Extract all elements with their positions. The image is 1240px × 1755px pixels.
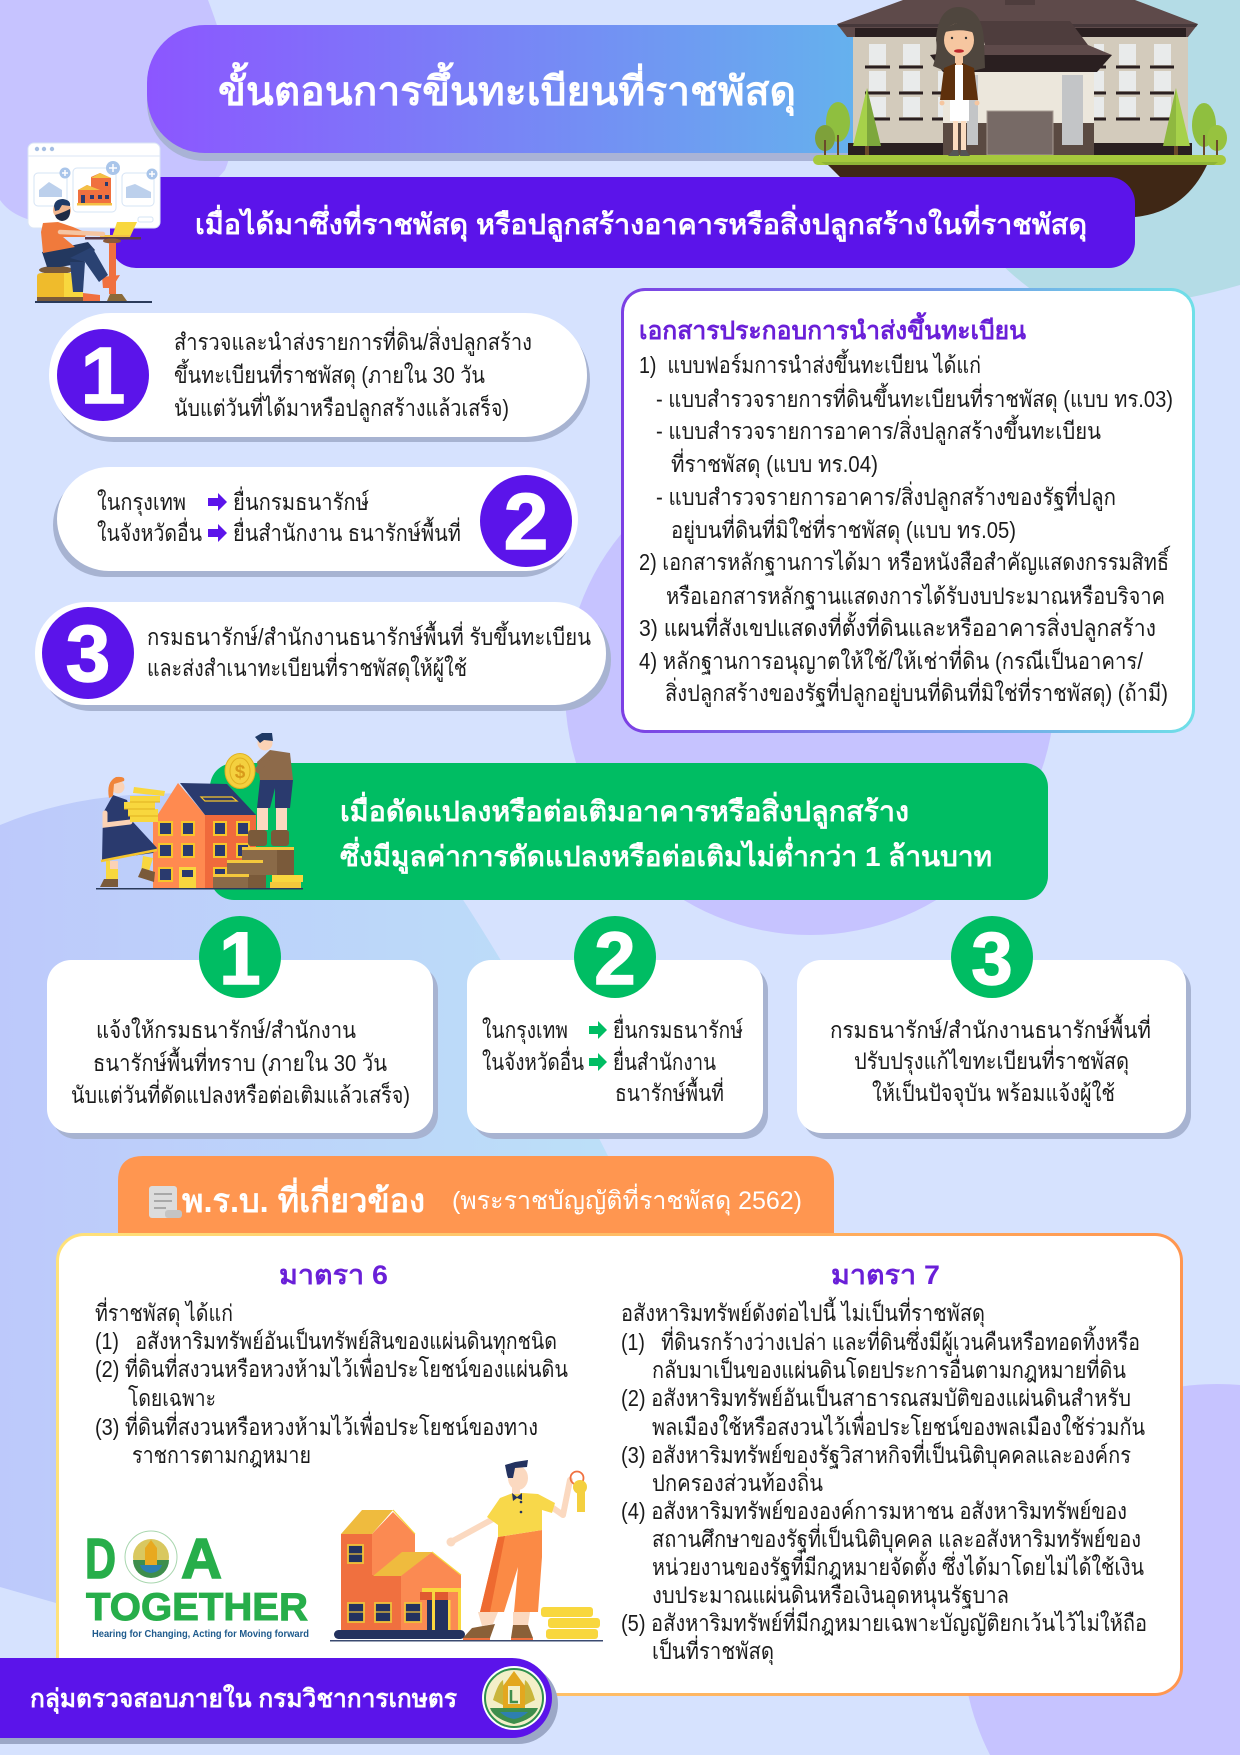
section 7 text: (3) อสังหาริมทรัพย์ของรัฐวิสาหกิจที่เป็นนิติบุคคลและองค์กร (621, 1439, 1131, 1469)
card 2: ในจังหวัดอื่น (482, 1046, 584, 1075)
documents list: 2) เอกสารหลักฐานการได้มา หรือหนังสือสำคัญแสดงกรรมสิทธิ์ (639, 545, 1171, 576)
card 2 (467, 916, 768, 1139)
step 2 number: 2 (504, 477, 548, 566)
card 1: ธนารักษ์พื้นที่ทราบ (ภายใน 30 วัน (93, 1047, 387, 1076)
section 7 text: ปกครองส่วนท้องถิ่น (652, 1467, 823, 1496)
card 3: ให้เป็นปัจจุบัน พร้อมแจ้งผู้ใช้ (872, 1078, 1115, 1107)
icon: building on floating island with woman (813, 0, 1227, 217)
step 3 pill: และส่งสำเนาทะเบียนที่ราชพัสดุให้ผู้ใช้ (147, 652, 467, 682)
card 1: นับแต่วันที่ดัดแปลงหรือต่อเติมแล้วเสร็จ) (71, 1079, 410, 1108)
title banner: ขั้นตอนการขึ้นทะเบียนที่ราชพัสดุ (218, 62, 796, 117)
section 7 text: (1) ที่ดินรกร้างว่างเปล่า และที่ดินซึ่งมีผู้เวนคืนหรือทอดทิ้งหรือ (621, 1326, 1140, 1356)
subtitle banner: acquisition or construction (110, 177, 1135, 268)
section 6 text: ราชการตามกฎหมาย (132, 1442, 311, 1468)
step 1 pill: สำรวจและนำส่งรายการที่ดิน/สิ่งปลูกสร้าง (174, 326, 532, 356)
orange tab: related act (118, 1156, 834, 1240)
card 1 number: 1 (219, 917, 261, 1000)
section 7 text: กลับมาเป็นของแผ่นดินโดยประการอื่นตามกฎหมายที่ดิน (652, 1354, 1126, 1383)
section 7 text: (2) อสังหาริมทรัพย์อันเป็นสาธารณสมบัติของแผ่นดินสำหรับ (621, 1383, 1131, 1411)
section 6 text: (1) อสังหาริมทรัพย์อันเป็นทรัพย์สินของแผ่นดินทุกชนิด (95, 1326, 557, 1355)
documents list: - แบบสำรวจรายการอาคาร/สิ่งปลูกสร้างขึ้นทะเบียน (656, 415, 1101, 445)
green banner: renovation: ซึ่งมีมูลค่าการดัดแปลงหรือต่อเติมไม่ต่ำกว่า 1 ล้านบาท (340, 836, 992, 874)
step 1 pill (49, 313, 590, 442)
card 1 (47, 916, 438, 1139)
section 6 text: โดยเฉพาะ (128, 1385, 216, 1411)
card 1: แจ้งให้กรมธนารักษ์/สำนักงาน (96, 1017, 356, 1043)
section 6 text: (3) ที่ดินที่สงวนหรือหวงห้ามไว้เพื่อประโยชน์ของทาง (95, 1411, 538, 1440)
logo: DOA Together (85, 1527, 309, 1640)
card 2 number: 2 (594, 917, 636, 1000)
green banner: renovation (210, 763, 1048, 900)
section 7 text: สถานศึกษาของรัฐที่เป็นนิติบุคคล และอสังหาริมทรัพย์ของ (652, 1523, 1141, 1553)
step 2 pill: ยื่นกรมธนารักษ์ (233, 486, 369, 515)
panel: law sections (56, 1233, 1183, 1696)
section 7 text: (4) อสังหาริมทรัพย์ขององค์การมหาชน อสังหาริมทรัพย์ของ (621, 1498, 1127, 1524)
section 6 text (95, 1297, 568, 1468)
green banner: renovation: เมื่อดัดแปลงหรือต่อเติมอาคารหรือสิ่งปลูกสร้าง (340, 791, 909, 829)
step 2 pill: ในจังหวัดอื่น (97, 517, 202, 546)
documents list: 3) แผนที่สังเขปแสดงที่ตั้งที่ดินและหรืออาคารสิ่งปลูกสร้าง (639, 612, 1156, 642)
orange tab: related act: พ.ร.บ. ที่เกี่ยวข้อง (182, 1177, 425, 1219)
card 2: ยื่นกรมธนารักษ์ (613, 1014, 743, 1043)
icon: department seal (482, 1666, 546, 1730)
step 1 number (57, 329, 149, 421)
documents list (639, 349, 1173, 707)
logo: DOA Together: TOGETHER (86, 1586, 308, 1629)
title banner (147, 25, 907, 161)
documents list: อยู่บนที่ดินที่มิใช่ที่ราชพัสดุ (แบบ ทร.05) (671, 514, 1016, 544)
documents list: สิ่งปลูกสร้างของรัฐที่ปลูกอยู่บนที่ดินที่มิใช่ที่ราชพัสดุ) (ถ้ามี) (665, 677, 1168, 707)
step 2 pill (53, 467, 578, 577)
logo: DOA Together: A (181, 1527, 222, 1591)
logo: DOA Together: Hearing for Changing, Acting for Moving forward (92, 1629, 309, 1640)
icon: house with coins and two people (96, 733, 303, 890)
card 2: ในกรุงเทพ (482, 1017, 568, 1044)
step 3 pill: กรมธนารักษ์/สำนักงานธนารักษ์พื้นที่ รับขึ้นทะเบียน (147, 621, 591, 650)
step 3 number (42, 607, 134, 699)
card 3: ปรับปรุงแก้ไขทะเบียนที่ราชพัสดุ (854, 1045, 1129, 1075)
icon: scroll (149, 1186, 182, 1218)
step 1 pill: ขึ้นทะเบียนที่ราชพัสดุ (ภายใน 30 วัน (174, 359, 485, 389)
icon: house with coins and two people: $ (235, 762, 246, 783)
card 3 number: 3 (971, 917, 1013, 1000)
section 6 text: ที่ราชพัสดุ ได้แก่ (95, 1297, 233, 1327)
orange tab: related act: (พระราชบัญญัติที่ราชพัสดุ 2562) (452, 1183, 802, 1216)
section 7 text: งบประมาณแผ่นดินหรือเงินอุดหนุนรัฐบาล (652, 1582, 1009, 1609)
documents heading: เอกสารประกอบการนำส่งขึ้นทะเบียน (639, 311, 1026, 345)
section 7 heading: มาตรา 7 (831, 1260, 940, 1290)
card 2: ยื่นสำนักงาน (613, 1046, 716, 1075)
step 3 pill (35, 602, 611, 711)
section 7 text: พลเมืองใช้หรือสงวนไว้เพื่อประโยชน์ของพลเมืองใช้ร่วมกัน (652, 1411, 1145, 1440)
footer bar (0, 1658, 558, 1744)
footer bar: กลุ่มตรวจสอบภายใน กรมวิชาการเกษตร (30, 1683, 458, 1715)
card 3 (797, 916, 1191, 1139)
logo: DOA Together: D (85, 1527, 116, 1591)
step 2 pill: ในกรุงเทพ (97, 489, 186, 516)
step 2 pill: ยื่นสำนักงาน ธนารักษ์พื้นที่ (233, 517, 461, 546)
documents list: หรือเอกสารหลักฐานแสดงการได้รับงบประมาณหรือบริจาค (666, 583, 1165, 610)
panel: required documents (621, 288, 1195, 733)
step 2 number (480, 475, 572, 567)
card 2: ธนารักษ์พื้นที่ (615, 1077, 724, 1106)
section 6 heading: มาตรา 6 (279, 1260, 388, 1290)
documents list: 4) หลักฐานการอนุญาตให้ใช้/ให้เช่าที่ดิน (กรณีเป็นอาคาร/ (639, 645, 1144, 675)
subtitle banner: acquisition or construction: เมื่อได้มาซึ่งที่ราชพัสดุ หรือปลูกสร้างอาคารหรือสิ่งปลูกสร้างในที่ราชพัสดุ (195, 204, 1087, 242)
step 1 number: 1 (81, 331, 125, 420)
icon: man with key and house (330, 1460, 603, 1642)
documents list: - แบบสำรวจรายการที่ดินขึ้นทะเบียนที่ราชพัสดุ (แบบ ทร.03) (656, 383, 1173, 413)
documents list: ที่ราชพัสดุ (แบบ ทร.04) (671, 448, 878, 478)
step 1 pill: นับแต่วันที่ได้มาหรือปลูกสร้างแล้วเสร็จ) (174, 392, 509, 422)
card 3: กรมธนารักษ์/สำนักงานธนารักษ์พื้นที่ (830, 1014, 1151, 1043)
card 2 number (574, 916, 656, 1000)
card 1 number (199, 916, 281, 1000)
section 7 text: อสังหาริมทรัพย์ดังต่อไปนี้ ไม่เป็นที่ราชพัสดุ (621, 1297, 985, 1327)
card 3 number (951, 916, 1033, 1000)
documents list: 1) แบบฟอร์มการนำส่งขึ้นทะเบียน ได้แก่ (639, 349, 981, 378)
section 7 text: เป็นที่ราชพัสดุ (652, 1635, 774, 1665)
section 7 text: หน่วยงานของรัฐที่มีกฎหมายจัดตั้ง ซึ่งได้มาโดยไม่ได้ใช้เงิน (652, 1551, 1144, 1581)
section 7 text (621, 1297, 1147, 1665)
section 7 text: (5) อสังหาริมทรัพย์ที่มีกฎหมายเฉพาะบัญญัติยกเว้นไว้ไม่ให้ถือ (621, 1607, 1147, 1636)
icon: man at desk with building cards (28, 143, 160, 303)
documents list: - แบบสำรวจรายการอาคาร/สิ่งปลูกสร้างของรัฐที่ปลูก (656, 481, 1116, 511)
step 3 number: 3 (66, 609, 110, 698)
section 6 text: (2) ที่ดินที่สงวนหรือหวงห้ามไว้เพื่อประโยชน์ของแผ่นดิน (95, 1353, 568, 1382)
